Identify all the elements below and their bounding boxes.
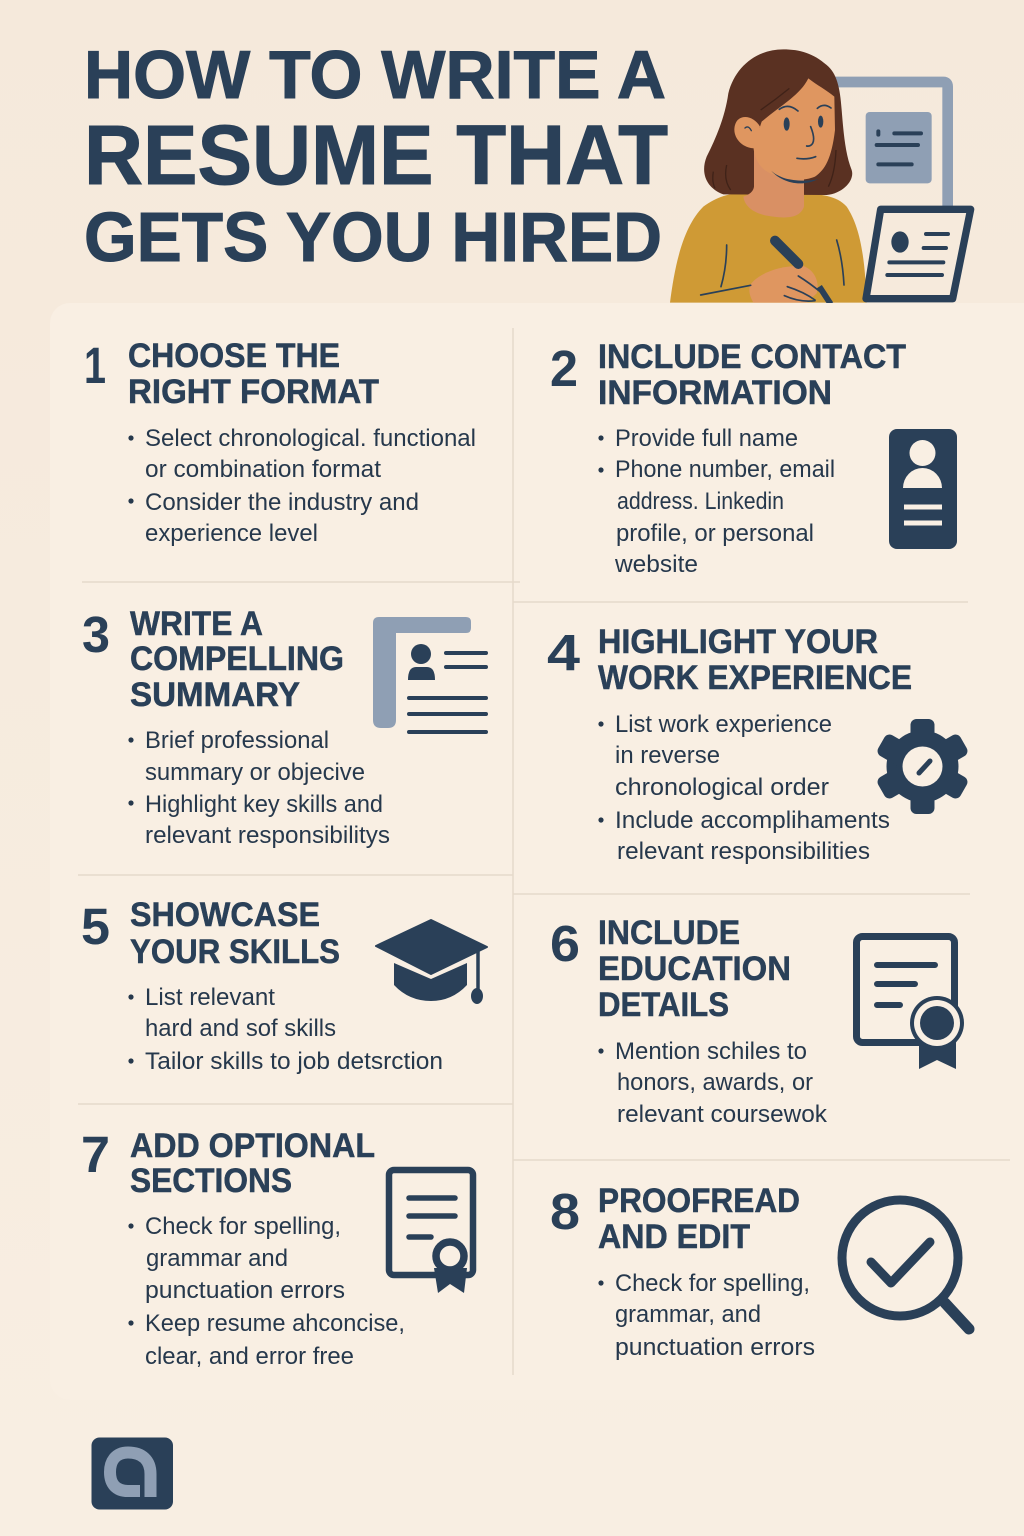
bullet text: Consider the industry and — [145, 489, 419, 516]
heading: EDUCATION — [598, 950, 791, 988]
bullet text: honors, awards, or — [617, 1069, 813, 1096]
logo — [92, 1438, 173, 1510]
bullet text — [598, 1038, 828, 1128]
backdrop frame — [835, 82, 948, 207]
bullet text: Keep resume ahconcise, — [145, 1310, 405, 1337]
icon: document with seal — [389, 1170, 473, 1293]
bullet text: or combination format — [145, 456, 381, 483]
bullet text: summary or objecive — [145, 759, 365, 786]
bullet text: chronological order — [615, 774, 829, 801]
icon: magnifying glass with check — [842, 1200, 969, 1329]
title: HOW TO WRITE A — [84, 37, 666, 113]
heading: SHOWCASE — [130, 896, 320, 934]
heading: INFORMATION — [598, 374, 832, 412]
bullet text: relevant responsibilities — [617, 838, 870, 865]
heading — [598, 338, 906, 412]
bullet text — [128, 727, 390, 849]
bullet text: grammar, and — [615, 1301, 761, 1328]
bullet text: experience level — [145, 520, 318, 547]
heading — [130, 605, 344, 714]
bullet text: address. Linkedin — [617, 488, 784, 515]
pen — [775, 241, 831, 304]
icon: id badge — [889, 429, 957, 549]
heading: COMPELLING — [130, 640, 344, 678]
sweater — [670, 192, 867, 303]
heading: INCLUDE — [598, 914, 740, 952]
number 1: 1 — [84, 337, 106, 394]
number 6: 6 — [550, 915, 580, 972]
number 8: 8 — [550, 1183, 580, 1240]
bullet text: List relevant — [145, 984, 275, 1011]
face — [753, 78, 835, 180]
bullet text — [128, 425, 476, 547]
bullet text: grammar and — [146, 1245, 288, 1272]
bullet text: website — [614, 551, 698, 578]
jaw shadow — [770, 169, 818, 183]
icon: gear — [875, 719, 970, 814]
bullet text — [128, 984, 443, 1075]
bullet text — [598, 425, 835, 578]
bullet text: in reverse — [615, 742, 720, 769]
hand — [749, 266, 818, 303]
icon: certificate — [856, 936, 964, 1069]
bullet text: Provide full name — [615, 425, 798, 452]
heading — [130, 1127, 375, 1200]
bullet text: clear, and error free — [145, 1343, 354, 1370]
heading: INCLUDE CONTACT — [598, 338, 906, 376]
heading: ADD OPTIONAL — [130, 1127, 375, 1165]
title: RESUME THAT — [84, 108, 668, 202]
heading — [128, 337, 379, 411]
bullet text: profile, or personal — [616, 520, 814, 547]
panel: step 8 proofread and edit — [550, 1182, 969, 1361]
heading: YOUR SKILLS — [130, 933, 340, 971]
bullet text — [598, 711, 890, 865]
bullet text: relevant coursewok — [617, 1101, 828, 1128]
bullet text: Select chronological. functional — [145, 425, 476, 452]
panel: step 5 showcase your skills — [81, 896, 487, 1075]
number 3: 3 — [82, 606, 110, 663]
heading — [130, 896, 340, 971]
number 7: 7 — [81, 1126, 110, 1183]
bullet text: Mention schiles to — [615, 1038, 807, 1065]
heading: HIGHLIGHT YOUR — [598, 623, 878, 661]
heading: CHOOSE THE — [128, 337, 340, 375]
hair — [704, 49, 852, 195]
bullet text: Check for spelling, — [145, 1213, 341, 1240]
backdrop document card — [866, 112, 932, 183]
title: GETS YOU HIRED — [84, 198, 662, 276]
bullet text: Phone number, email — [615, 456, 835, 483]
bullet text: punctuation errors — [145, 1277, 345, 1304]
sweater and finger lines — [701, 240, 844, 301]
heading: RIGHT FORMAT — [128, 373, 379, 411]
heading: SECTIONS — [130, 1162, 292, 1200]
number 2: 2 — [550, 340, 578, 397]
illustration: woman writing a resume — [670, 49, 971, 304]
bullet text: hard and sof skills — [145, 1015, 336, 1042]
facial features — [713, 88, 836, 190]
bullet text: Highlight key skills and — [145, 791, 383, 818]
heading: PROOFREAD — [598, 1182, 800, 1220]
heading: SUMMARY — [130, 676, 300, 714]
panel: step 4 highlight your work experience — [547, 623, 970, 865]
bullet text — [598, 1270, 815, 1361]
panel: step 3 write a compelling summary — [82, 605, 486, 849]
bullet text: punctuation errors — [615, 1334, 815, 1361]
number 4: 4 — [547, 624, 581, 681]
heading: WORK EXPERIENCE — [598, 659, 912, 697]
number 5: 5 — [81, 898, 110, 955]
heading: DETAILS — [598, 986, 729, 1024]
bullet text: Check for spelling, — [615, 1270, 810, 1297]
icon: graduation cap — [376, 920, 487, 1004]
title — [84, 37, 668, 276]
heading: WRITE A — [130, 605, 263, 643]
heading: AND EDIT — [598, 1218, 750, 1256]
panel: step 2 include contact information — [550, 338, 957, 578]
bullet text — [128, 1213, 405, 1370]
bullet text: Include accomplihaments — [615, 807, 890, 834]
panel: step 1 choose the right format — [84, 337, 476, 547]
heading — [598, 623, 912, 697]
tablet with resume — [866, 209, 971, 299]
neck — [743, 143, 804, 217]
main panel — [50, 303, 1024, 1400]
icon: resume page — [373, 617, 486, 732]
panel: step 6 include education details — [550, 914, 964, 1128]
bullet text: Tailor skills to job detsrction — [145, 1048, 443, 1075]
bullet text: relevant responsibilitys — [145, 822, 390, 849]
bullet text: List work experience — [615, 711, 832, 738]
ear — [734, 117, 760, 148]
heading — [598, 914, 791, 1024]
bullet text: Brief professional — [145, 727, 329, 754]
panel: step 7 add optional sections — [81, 1126, 473, 1370]
heading — [598, 1182, 800, 1256]
